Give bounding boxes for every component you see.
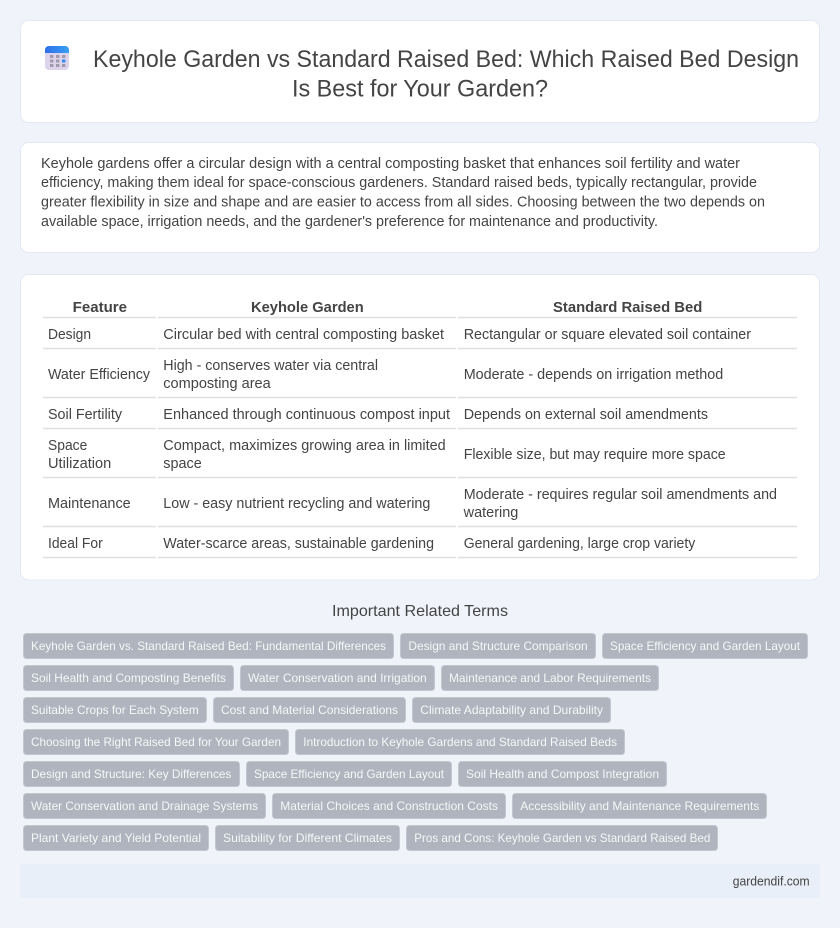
table row: space utilization: Compact, maximizes growing area in limited <box>163 438 446 454</box>
table row: design <box>43 327 797 348</box>
chip: Accessibility and Maintenance Requirements <box>520 799 759 813</box>
table row: ideal for: Ideal For <box>48 536 103 552</box>
table row: water efficiency <box>43 358 797 398</box>
chip <box>240 666 434 690</box>
table row: soil fertility: Enhanced through continuous compost input <box>163 407 450 423</box>
table row: soil fertility <box>43 407 797 428</box>
table row: water efficiency: Water Efficiency <box>48 367 151 383</box>
table row: ideal for <box>43 536 797 558</box>
heading: important related terms: Important Related Terms <box>332 603 508 620</box>
chip <box>246 762 452 786</box>
chip <box>296 730 624 754</box>
table row: soil fertility: Soil Fertility <box>48 407 123 423</box>
chip: Introduction to Keyhole Gardens and Standard Raised Beds <box>303 735 617 749</box>
table row: space utilization: Space <box>48 438 87 454</box>
table row: water efficiency: Moderate - depends on irrigation method <box>464 367 723 383</box>
table row: space utilization: Utilization <box>48 456 111 472</box>
chip <box>272 794 506 818</box>
table row: design: Design <box>48 327 91 343</box>
table row: soil fertility: Depends on external soil amendments <box>464 407 708 423</box>
table header row <box>43 299 797 318</box>
chip: Pros and Cons: Keyhole Garden vs Standard Raised Bed <box>414 831 710 845</box>
chip <box>214 698 406 722</box>
chip: Suitable Crops for Each System <box>31 703 199 717</box>
chip: Keyhole Garden vs. Standard Raised Bed: Fundamental Differences <box>31 639 386 653</box>
table row: water efficiency: composting area <box>163 376 271 392</box>
chip: Design and Structure: Key Differences <box>31 767 231 781</box>
heading: page title <box>93 46 799 102</box>
chip <box>406 826 718 850</box>
table header row: Feature <box>73 299 127 316</box>
chip: Space Efficiency and Garden Layout <box>610 639 801 653</box>
table row: maintenance: Moderate - requires regular soil amendments and <box>464 487 777 503</box>
table row: ideal for: General gardening, large crop variety <box>464 536 696 552</box>
chip: Design and Structure Comparison <box>408 639 588 653</box>
text block: introduction paragraph: greater flexibility in size and shape and are easier to access from all sides. Choosing between the two depends on <box>41 194 765 210</box>
chip: Soil Health and Compost Integration <box>466 767 659 781</box>
table row: maintenance: watering <box>463 505 518 521</box>
chip <box>602 634 808 658</box>
chip: Space Efficiency and Garden Layout <box>254 767 445 781</box>
chip <box>458 762 666 786</box>
chip: Suitability for Different Climates <box>223 831 392 845</box>
text block: introduction paragraph: Keyhole gardens offer a circular design with a central composting basket that enhances soil fertility and water <box>41 156 740 172</box>
table header row: Keyhole Garden <box>251 299 364 316</box>
chip: Climate Adaptability and Durability <box>420 703 603 717</box>
panel: title header <box>20 20 820 122</box>
chips: related terms <box>24 634 808 850</box>
table row: design: Circular bed with central composting basket <box>163 327 444 343</box>
table row: space utilization: space <box>163 456 202 472</box>
table row: design: Rectangular or square elevated soil container <box>464 327 751 343</box>
chip <box>442 666 658 690</box>
chip: Cost and Material Considerations <box>221 703 398 717</box>
chip <box>24 730 288 754</box>
text block: introduction paragraph <box>41 156 765 230</box>
icon: calendar <box>45 46 69 70</box>
chip: Plant Variety and Yield Potential <box>31 831 201 845</box>
chip: Maintenance and Labor Requirements <box>449 671 651 685</box>
footer: gardendif.com <box>733 874 810 888</box>
table row: water efficiency: High - conserves water via central <box>163 358 378 374</box>
chip: Choosing the Right Raised Bed for Your Garden <box>31 735 281 749</box>
table row: space utilization <box>43 438 797 478</box>
chip <box>512 794 766 818</box>
text block: introduction paragraph: available space, irrigation needs, and the gardener's preference for maintenance and productivity. <box>41 214 658 230</box>
chip <box>24 698 206 722</box>
table row: space utilization: Flexible size, but may require more space <box>464 447 726 463</box>
text block: introduction paragraph: efficiency, making them ideal for space-conscious gardeners. Standard raised beds, typically rectangular, provide <box>41 175 757 191</box>
chip <box>24 826 208 850</box>
heading: page title: Keyhole Garden vs Standard Raised Bed: Which Raised Bed Design <box>93 46 799 73</box>
footer <box>20 864 820 898</box>
chip: Material Choices and Construction Costs <box>280 799 498 813</box>
panel: comparison table <box>20 274 820 580</box>
table header row: Standard Raised Bed <box>553 299 702 316</box>
chip: Soil Health and Composting Benefits <box>31 671 226 685</box>
chip <box>24 762 240 786</box>
chip <box>24 666 234 690</box>
chip <box>412 698 610 722</box>
chip <box>24 794 266 818</box>
table row: maintenance: Low - easy nutrient recycling and watering <box>163 496 430 512</box>
chip <box>216 826 400 850</box>
chip: Water Conservation and Drainage Systems <box>31 799 258 813</box>
chip <box>24 634 394 658</box>
table row: ideal for: Water-scarce areas, sustainable gardening <box>163 536 434 552</box>
panel: introduction <box>20 142 820 252</box>
table row: maintenance <box>43 487 797 526</box>
table row: maintenance: Maintenance <box>48 496 131 512</box>
chip <box>400 634 596 658</box>
heading: page title: Is Best for Your Garden? <box>292 76 548 102</box>
chip: Water Conservation and Irrigation <box>248 671 427 685</box>
